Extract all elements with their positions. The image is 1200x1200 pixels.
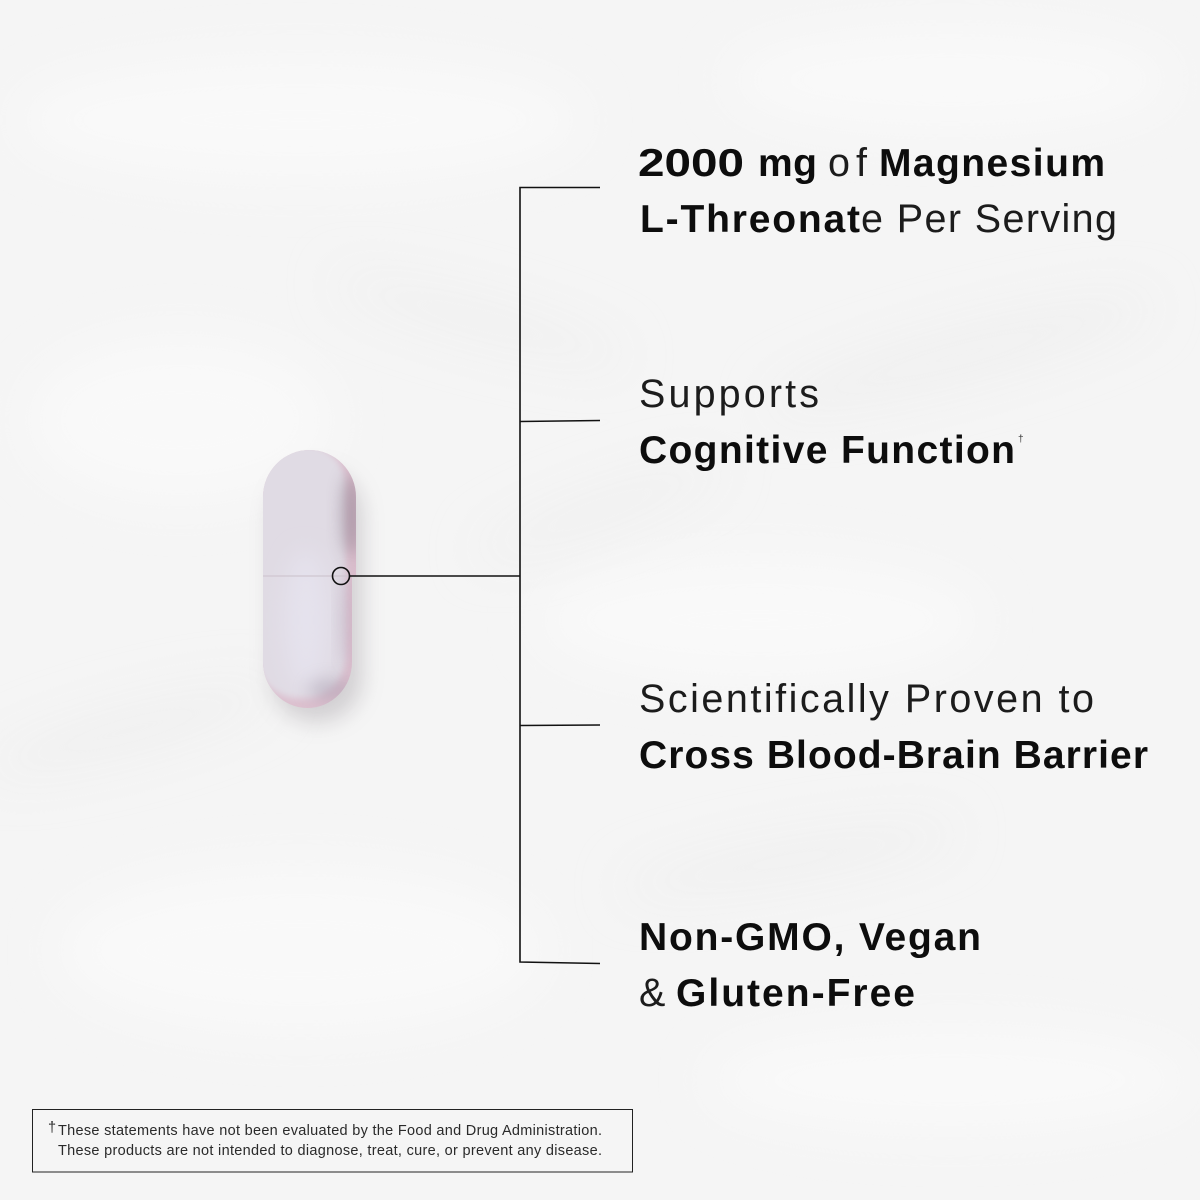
pill capsule <box>263 450 371 730</box>
text: magnesium dosage: Magnesium <box>879 142 1105 185</box>
text: magnesium dosage: L-Threonat <box>640 198 860 241</box>
text: magnesium dosage: 2000 <box>638 142 744 185</box>
dagger mark: † <box>48 1120 56 1136</box>
text: dietary claims <box>639 916 981 1015</box>
text: dietary claims: Non-GMO, Vegan <box>639 916 981 959</box>
text: cognitive function: † <box>1018 434 1024 445</box>
pill shadow <box>272 470 362 722</box>
text: magnesium dosage <box>638 141 1117 241</box>
disclaimer line 1: These statements have not been evaluated by the Food and Drug Administration. <box>58 1123 602 1139</box>
text: cognitive function <box>639 372 1024 472</box>
text: magnesium dosage: mg <box>758 142 817 185</box>
text: magnesium dosage: of <box>828 141 868 185</box>
disclaimer line 2: These products are not intended to diagnose, treat, cure, or prevent any disease. <box>58 1143 602 1159</box>
text: blood-brain barrier <box>639 677 1148 777</box>
capsule body <box>263 450 356 708</box>
text: magnesium dosage: e Per Serving <box>861 197 1117 241</box>
text: cognitive function: Supports <box>639 372 819 416</box>
text: dietary claims: Gluten-Free <box>676 972 915 1015</box>
text: blood-brain barrier: Scientifically Proven to <box>639 677 1094 721</box>
text: dietary claims: & <box>639 971 665 1015</box>
text: cognitive function: Cognitive Function <box>639 429 1015 472</box>
text: blood-brain barrier: Cross Blood-Brain Barrier <box>639 734 1148 777</box>
